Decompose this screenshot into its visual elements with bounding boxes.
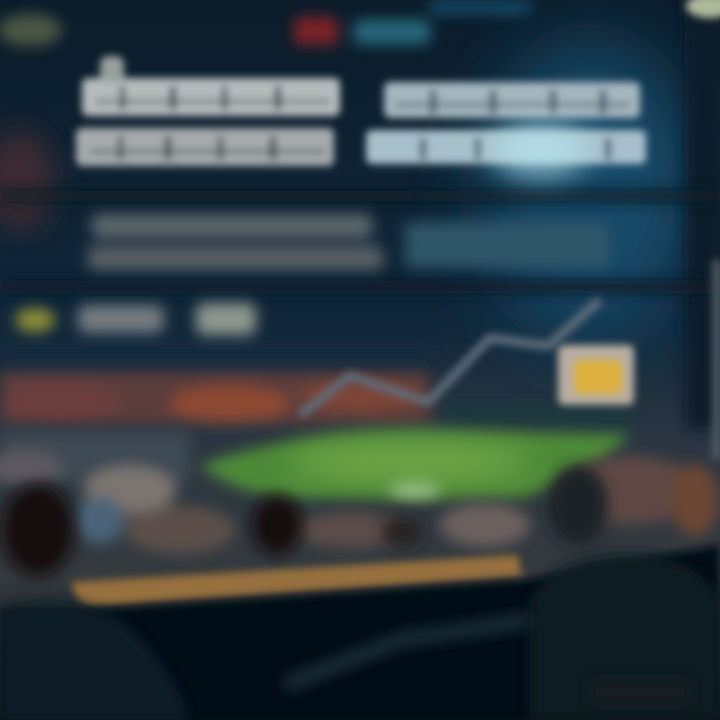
silhouette: right spectators xyxy=(530,465,720,720)
callout: yellow card xyxy=(558,345,634,405)
silhouette: centre spectator xyxy=(252,495,302,555)
letter gaps xyxy=(90,86,330,160)
title: blurred headline xyxy=(76,56,646,166)
stands: red band xyxy=(0,372,630,427)
line chart: trend line xyxy=(300,300,600,415)
subtitle: blurred second line xyxy=(88,214,610,270)
crowd xyxy=(0,432,719,554)
data labels row xyxy=(15,303,256,335)
table: wooden desk xyxy=(72,555,522,606)
silhouette: left spectator xyxy=(0,484,190,720)
silhouette: small centre head xyxy=(382,517,422,547)
football pitch xyxy=(200,430,630,498)
glow behind title xyxy=(492,124,588,176)
top logo marks xyxy=(294,0,530,45)
foreground: dark lower area xyxy=(0,545,720,720)
foreground: reflections on desk xyxy=(285,620,530,685)
